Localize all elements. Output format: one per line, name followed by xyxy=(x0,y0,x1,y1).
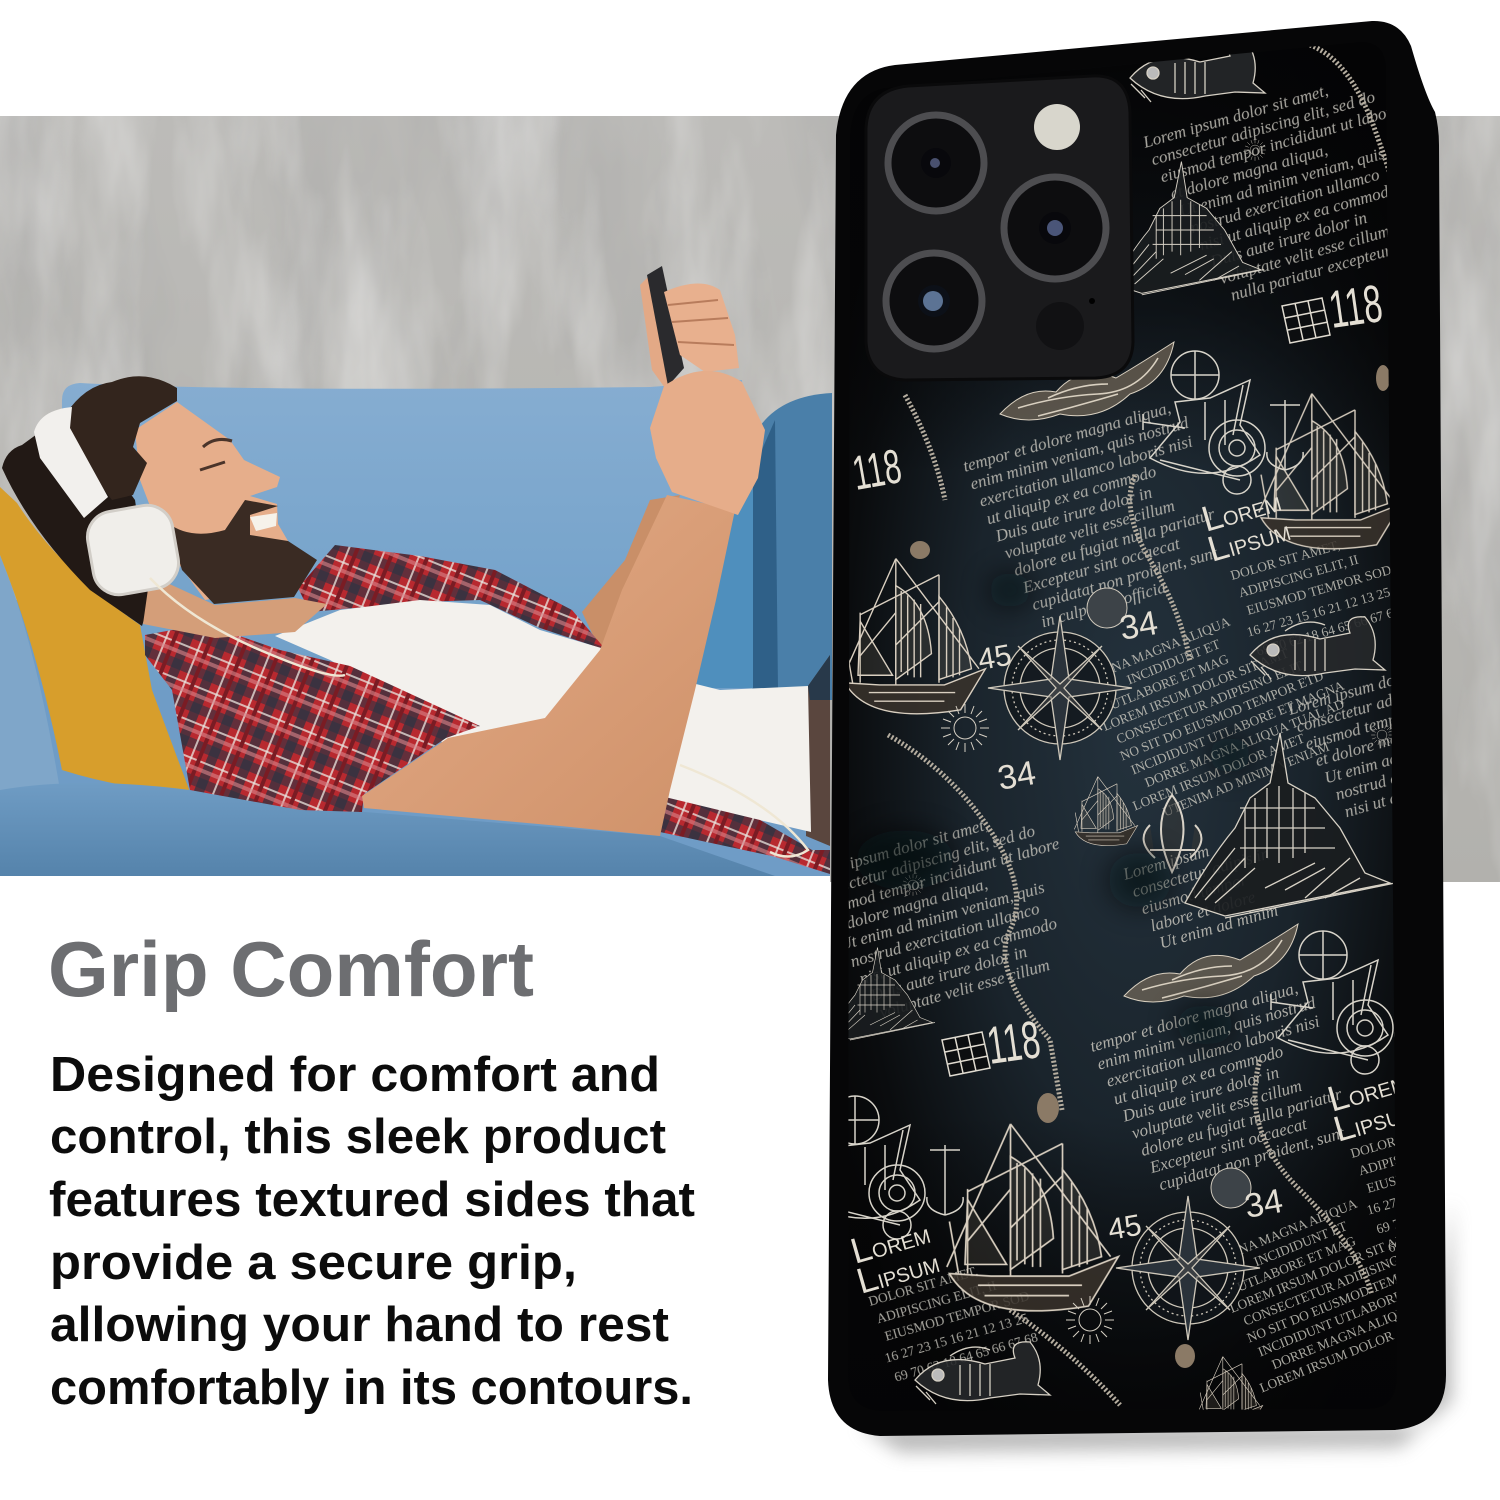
script text blocks: enim minim veniam, quis nostrud xyxy=(1095,993,1318,1074)
shaded gap near wrist xyxy=(690,470,753,688)
arm xyxy=(362,495,735,836)
uppercase text blocks: INCIDIDUNT UTLABORE ET MAGNA xyxy=(1256,1260,1474,1359)
script text blocks: tempor et dolore magna aliqua, xyxy=(1088,978,1300,1056)
script text blocks: tempor et dolore magna aliqua, xyxy=(961,398,1173,476)
script text blocks: consectetur adipiscing elit, sed do xyxy=(809,821,1037,903)
map coastlines xyxy=(888,45,1394,1405)
printed artwork xyxy=(848,46,1397,1410)
uppercase text blocks: NA MAGNA ALIQUA xyxy=(1109,614,1232,675)
face xyxy=(135,402,300,600)
script text blocks: eiusmod tempor incididunt ut labore xyxy=(818,834,1062,920)
script text blocks: et dolore magna aliqua, xyxy=(1313,707,1475,770)
body text: Designed for comfort and xyxy=(50,1048,660,1102)
lorem ipsum labels: LOREM xyxy=(1323,1058,1411,1120)
script text blocks: nostrud exercitation xyxy=(1333,748,1470,804)
white t-shirt chest xyxy=(275,600,625,760)
drop shadow xyxy=(860,1200,1452,1452)
script text blocks: nisi ut aliquip ex ea commodo xyxy=(857,914,1059,988)
camera bump xyxy=(866,76,1133,380)
uppercase text blocks: UTLABORE ET MAG xyxy=(1108,651,1231,712)
lorem ipsum labels: LOREM xyxy=(846,1210,934,1272)
uppercase text blocks: 69 70 62 18 64 65 xyxy=(1375,1195,1473,1237)
script text blocks: labore et dolore xyxy=(1148,887,1258,935)
flash xyxy=(1034,104,1080,150)
plaid shirt upper xyxy=(298,545,606,650)
uppercase text blocks: LOREM IRSUM DOLOR AMET xyxy=(1257,1312,1434,1395)
uppercase text blocks: ADIPISCING ELIT, II xyxy=(1357,1130,1480,1178)
body text: control, this sleek product xyxy=(50,1110,666,1164)
jeans xyxy=(806,655,830,846)
uppercase text blocks: DORRE MAGNA ALIQUA TUAL AD xyxy=(1270,1278,1474,1372)
castles xyxy=(830,162,1395,1040)
uppercase text blocks: ADIPISCING ELIT, II xyxy=(875,1278,998,1326)
finger gaps xyxy=(668,300,734,345)
uppercase text blocks: LOREM IRSUM DOLOR SIT AMT xyxy=(1227,1227,1418,1316)
cable xyxy=(150,578,808,857)
teeth xyxy=(250,513,277,531)
uppercase text blocks: INCIDIDUNT ET xyxy=(1252,1218,1350,1269)
plaid hem xyxy=(660,797,830,874)
script text blocks: nostrud exercitation ullamco xyxy=(848,899,1042,971)
hands holding phone xyxy=(640,266,765,515)
uppercase text blocks: EIUSMOD TEMPOR SOD xyxy=(883,1288,1031,1344)
far arm xyxy=(582,495,680,650)
headband xyxy=(34,407,108,518)
script text blocks: cupidatat non proident, sunt xyxy=(1157,1123,1348,1194)
sofa seat xyxy=(0,783,775,876)
script text blocks: Ut enim ad minim xyxy=(1157,901,1280,952)
sofa left cushion xyxy=(0,555,60,795)
grid number squares xyxy=(942,298,1330,1076)
uppercase text blocks: INCIDIDUNT UTLABORE ET MAGNA xyxy=(1129,678,1347,777)
uppercase text blocks: EIUSMOD TEMPOR xyxy=(1365,1148,1484,1196)
script text blocks: Ut enim ad minim veniam, quis xyxy=(1177,144,1387,220)
beard xyxy=(168,500,317,604)
phone in hand xyxy=(647,266,684,386)
uppercase text blocks: UTENIM AD MINIM VENIAM xyxy=(1161,739,1331,819)
ships xyxy=(843,394,1401,1426)
script text blocks: Ut enim ad minim veniam, quis xyxy=(837,878,1047,954)
sofa back cushion xyxy=(60,380,748,690)
uppercase text blocks: 16 27 23 15 16 21 xyxy=(1365,1176,1463,1218)
script text blocks: Ut enim ad minim veniam xyxy=(1322,721,1496,787)
dark ink blotches xyxy=(855,572,1252,1045)
script text blocks: eiusmod tempor incididunt ut labore xyxy=(1158,100,1402,186)
script text blocks: dolore eu fugiat nulla pariatur xyxy=(1012,504,1217,580)
uppercase text blocks: NO SIT DO EIUSMOD TEMPOR ETD xyxy=(1118,668,1326,763)
script text blocks: Lorem ipsum dolor sit amet, xyxy=(1285,648,1475,719)
suns and moons xyxy=(902,139,1393,1344)
script text blocks: exercitation ullamco laboris nisi xyxy=(977,432,1195,511)
uppercase text blocks: 69 70 62 18 64 65 66 67 68 xyxy=(1255,603,1402,659)
uppercase text blocks: EIUSMOD TEMPOR SOD xyxy=(1245,562,1393,618)
script text blocks: et dolore magna aliqua, xyxy=(1168,140,1330,203)
script text blocks: in culpa qui officia xyxy=(1039,578,1168,631)
numerals: 34 xyxy=(1117,604,1161,648)
script text blocks: Excepteur sint occaecat xyxy=(1020,534,1183,597)
script text blocks: Lorem ipsum dolor sit amet, xyxy=(1140,81,1330,152)
fish xyxy=(915,40,1385,1404)
sofa armrest xyxy=(752,393,832,700)
rear thumb xyxy=(640,275,672,392)
body text: provide a secure grip, xyxy=(50,1236,577,1290)
uppercase text blocks: INCIDIDUNT ET xyxy=(1125,636,1223,687)
case body xyxy=(828,21,1446,1436)
microphone xyxy=(1089,298,1095,304)
uppercase text blocks: CONSECTETUR ADIPISING ELIT xyxy=(1114,658,1305,747)
script text blocks: ut aliquip ex ea commodo xyxy=(1111,1042,1285,1108)
artwork base xyxy=(850,208,1394,1326)
script text blocks: et dolore magna aliqua, xyxy=(828,874,990,937)
top and bottom darkening xyxy=(968,55,1342,1410)
upper hand fingers xyxy=(664,283,739,372)
uppercase text blocks: NA MAGNA ALIQUA xyxy=(1236,1196,1359,1257)
script text blocks: voluptate velit esse cillum xyxy=(877,955,1052,1022)
numerals: 118 xyxy=(983,1010,1044,1076)
script text blocks: ut aliquip ex ea commodo xyxy=(984,462,1158,528)
script text blocks: cupidatat non proident, sunt xyxy=(1030,543,1221,614)
ear cup xyxy=(83,501,183,599)
script text blocks: Lorem ipsum dolor sit amet, xyxy=(800,815,990,886)
script text blocks: Duis aute irure dolor in xyxy=(1119,1063,1281,1126)
numerals: 45 xyxy=(975,639,1014,677)
lens top left xyxy=(888,115,984,211)
numerals: 118 xyxy=(1325,274,1386,340)
lorem ipsum labels xyxy=(846,478,1420,1302)
script text blocks: consectetur adipiscing elit, sed xyxy=(1294,660,1500,736)
script text blocks: Excepteur sint occaecat xyxy=(1147,1114,1310,1177)
sofa fill behind figure xyxy=(0,600,830,876)
armrest fold xyxy=(753,420,778,690)
eye and brow xyxy=(200,439,232,470)
photo: man relaxing on sofa with phone xyxy=(0,116,1500,882)
script text blocks: exercitation ullamco laboris nisi xyxy=(1104,1012,1322,1091)
numerals: 34 xyxy=(995,754,1039,798)
script text blocks: consectetur adipiscing elit, sed do xyxy=(1149,87,1377,169)
body text: comfortably in its contours. xyxy=(50,1361,693,1415)
body text: features textured sides that xyxy=(49,1173,695,1227)
uppercase text blocks: LOREM IRSUM DOLOR AMET xyxy=(1130,730,1307,813)
neck xyxy=(143,575,327,638)
uppercase text blocks: DORRE MAGNA ALIQUA TUAL AD xyxy=(1143,696,1347,790)
body text xyxy=(49,1048,695,1415)
script text blocks: Duis aute irure dolor in xyxy=(867,942,1029,1005)
script text blocks: nisi ut aliquip ex ea xyxy=(1342,766,1476,821)
islands xyxy=(1000,342,1298,1002)
lidar sensor xyxy=(1036,302,1084,350)
lower hand xyxy=(650,371,765,515)
script text blocks: voluptate velit esse cillum xyxy=(1217,221,1392,288)
uppercase text blocks: DOLOR SIT AMET, xyxy=(867,1263,980,1309)
uppercase text blocks: CONSECTETUR ADIPISING ELIT xyxy=(1241,1240,1432,1329)
uppercase text blocks: ADIPISCING ELIT, II xyxy=(1237,552,1360,600)
uppercase text blocks: UTLABORE ET MAG xyxy=(1235,1233,1358,1294)
hair top xyxy=(65,376,177,500)
script text blocks: enim minim veniam, quis nostrud xyxy=(968,413,1191,494)
fleur de lis xyxy=(1144,795,1201,872)
lens bottom left xyxy=(886,253,982,349)
sextants xyxy=(803,351,1431,1239)
script text blocks: dolore eu fugiat nulla pariatur xyxy=(1139,1084,1344,1160)
uppercase text blocks: NO SIT DO EIUSMOD TEMPOR ETD xyxy=(1245,1250,1453,1345)
small tan accents xyxy=(910,365,1390,1368)
uppercase text blocks: 66 67 68 xyxy=(1386,1228,1436,1255)
phone case xyxy=(800,21,1500,1452)
numerals: 118 xyxy=(849,439,905,501)
concrete wall xyxy=(0,116,1500,882)
lorem ipsum labels: LOREM xyxy=(1197,478,1285,540)
script text blocks: eiusmod tempor incididunt xyxy=(1303,685,1485,753)
uppercase text blocks: 69 70 62 18 64 65 66 67 68 xyxy=(893,1329,1040,1385)
lorem ipsum labels: LIPSUM xyxy=(1329,1087,1420,1150)
numerals: 45 xyxy=(1105,1209,1144,1247)
uppercase text blocks: DOLOR SIT AMET, xyxy=(1229,537,1342,583)
plaid shirt sleeve xyxy=(145,624,480,812)
script text blocks: nisi ut aliquip ex ea commodo xyxy=(1197,180,1399,254)
compass roses xyxy=(988,616,1260,1340)
lorem ipsum labels: LIPSUM xyxy=(1203,507,1294,570)
white t-shirt right xyxy=(665,680,811,832)
uppercase text blocks xyxy=(868,541,1397,1392)
yellow pillow xyxy=(0,487,190,792)
uppercase text blocks: 16 27 23 15 16 21 12 13 25 xyxy=(1245,584,1392,640)
script text blocks: Duis aute irure dolor in xyxy=(1207,208,1369,271)
numerals xyxy=(849,274,1386,1247)
script text blocks: Lorem ipsum xyxy=(1120,841,1211,884)
lorem ipsum labels: LIPSUM xyxy=(852,1239,943,1302)
heading: Grip Comfort xyxy=(48,925,534,1013)
camera module xyxy=(866,76,1133,380)
script text blocks: voluptate velit esse cillum xyxy=(1002,496,1177,563)
body text: allowing your hand to rest xyxy=(50,1298,669,1352)
script text blocks: Duis aute irure dolor in xyxy=(992,483,1154,546)
script text blocks xyxy=(848,87,1392,1190)
script text blocks: nulla pariatur excepteur sint xyxy=(1228,232,1422,305)
uppercase text blocks: DOLOR SIT AMET, xyxy=(1349,1115,1462,1161)
uppercase text blocks: 16 27 23 15 16 21 12 13 25 xyxy=(883,1310,1030,1366)
hair back of head xyxy=(2,410,150,626)
lens right xyxy=(1004,177,1106,279)
uppercase text blocks: LOREM IRSUM DOLOR SIT AMT xyxy=(1100,645,1291,734)
script text blocks: consectetur adipis in xyxy=(1130,844,1271,901)
script text blocks: nostrud exercitation ullamco xyxy=(1188,165,1382,237)
numerals: 34 xyxy=(1242,1182,1286,1226)
script text blocks: eiusmod tempor xyxy=(1139,870,1249,918)
script text blocks: voluptate velit esse cillum xyxy=(1129,1076,1304,1143)
headphones xyxy=(34,407,808,857)
